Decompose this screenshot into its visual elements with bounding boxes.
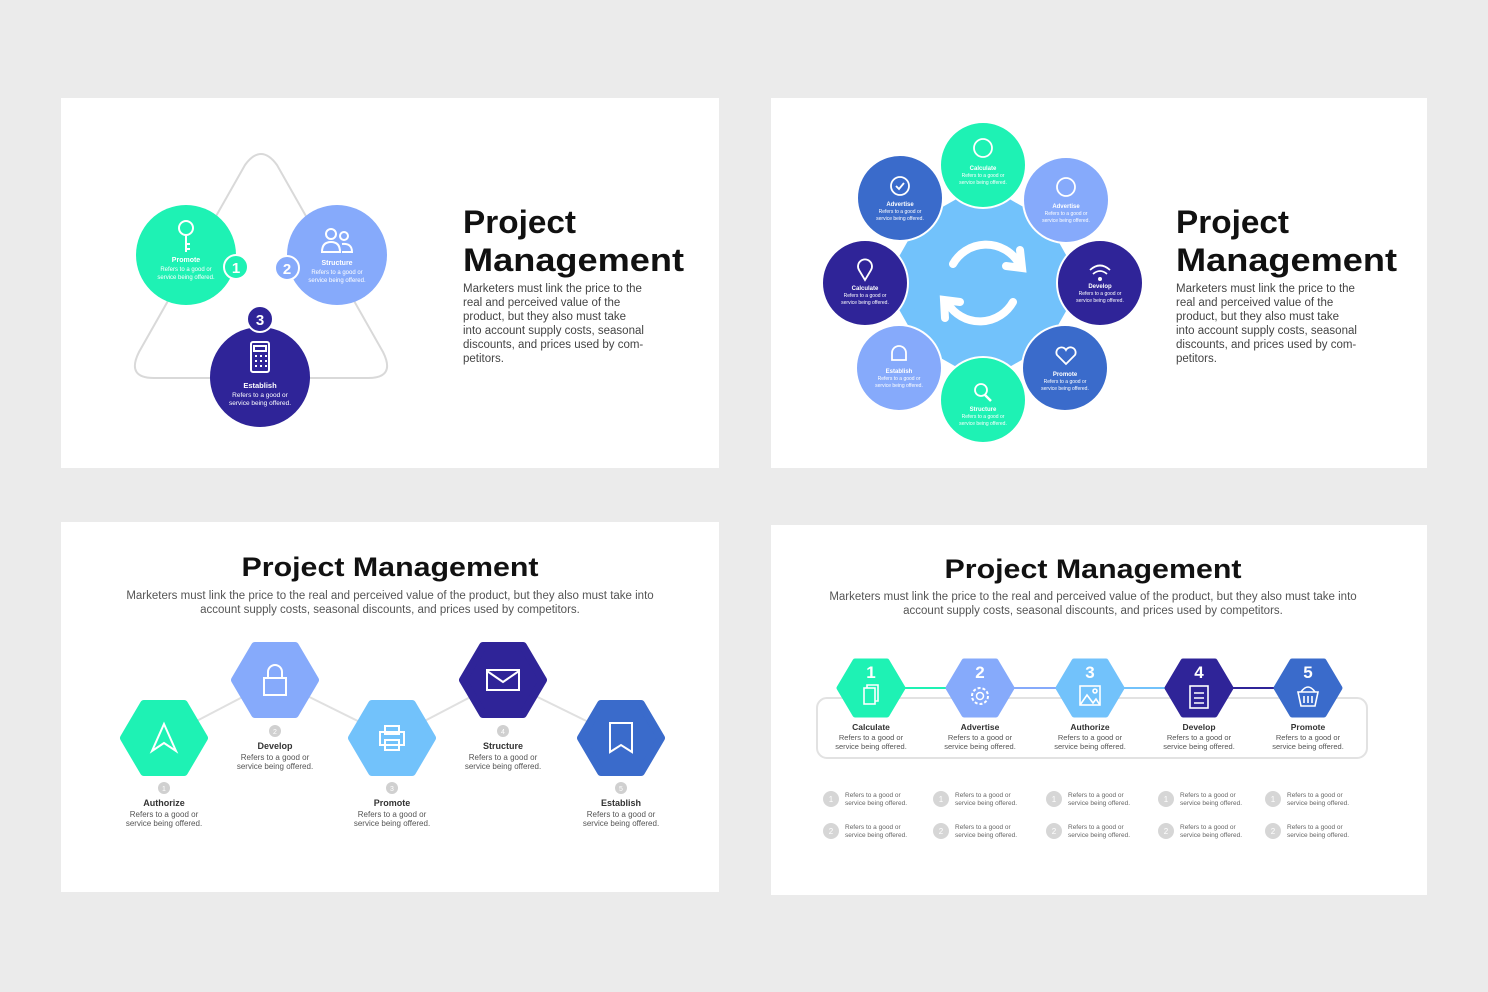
step 2 advertise: Advertise <box>961 722 1000 732</box>
circle: structure: Structure <box>321 260 353 267</box>
body text: petitors. <box>1176 353 1217 365</box>
hex: promote <box>352 704 432 828</box>
node: promote: Refers to a good or <box>1044 379 1087 385</box>
step 4 develop: Refers to a good or <box>1167 733 1232 742</box>
subtitle <box>126 590 654 616</box>
heading: Management <box>1176 242 1397 278</box>
body text: petitors. <box>463 353 504 365</box>
node: establish: Refers to a good or <box>878 376 921 382</box>
heading: Project Management <box>944 554 1242 584</box>
hex: promote: 3 <box>390 786 394 793</box>
circle: establish: Establish <box>243 381 277 390</box>
step 1 calculate: service being offered. <box>835 742 907 751</box>
step 5 promote <box>1272 661 1344 751</box>
hex: promote: Promote <box>374 798 410 808</box>
node: calculate top: Calculate <box>970 166 997 172</box>
node: structure: service being offered. <box>959 421 1007 427</box>
node: establish <box>856 325 942 411</box>
hex: establish: Establish <box>601 798 641 808</box>
card outline <box>817 698 1367 758</box>
step 5 promote: Promote <box>1291 722 1326 732</box>
node: develop <box>1057 240 1143 326</box>
node: calculate left: Calculate <box>852 286 879 292</box>
detail list: service being offered. <box>955 800 1017 807</box>
detail list: 1 <box>829 795 834 804</box>
hex: develop: Refers to a good or <box>241 753 310 762</box>
subtitle: account supply costs, seasonal discounts, and prices used by competitors. <box>903 605 1283 617</box>
detail list: Refers to a good or <box>1180 824 1236 831</box>
detail list: service being offered. <box>1287 832 1349 839</box>
node: advertise left: Advertise <box>886 202 914 208</box>
detail list: 1 <box>1164 795 1169 804</box>
connector line <box>900 687 1280 689</box>
detail list <box>823 791 1349 839</box>
step 3 authorize: Refers to a good or <box>1058 733 1123 742</box>
node: calculate top: service being offered. <box>959 180 1007 186</box>
detail list: service being offered. <box>1287 800 1349 807</box>
body text: into account supply costs, seasonal <box>463 325 644 337</box>
circle: structure: service being offered. <box>308 278 366 284</box>
hex: structure: 4 <box>501 729 505 736</box>
body text: Marketers must link the price to the <box>1176 283 1355 295</box>
detail list: 2 <box>1052 827 1057 836</box>
body text: real and perceived value of the <box>463 297 620 309</box>
detail list: Refers to a good or <box>1287 824 1343 831</box>
detail list: Refers to a good or <box>955 792 1011 799</box>
hex: structure: service being offered. <box>465 762 541 771</box>
circle: promote: Refers to a good or <box>160 267 212 273</box>
circle: promote <box>136 205 236 305</box>
subtitle <box>829 591 1357 617</box>
node: calculate top: Refers to a good or <box>962 173 1005 179</box>
hex: structure <box>463 646 543 771</box>
step 4 develop: Develop <box>1182 722 1216 732</box>
heading <box>463 204 684 278</box>
hex: structure: Structure <box>483 741 523 751</box>
hex: authorize <box>124 704 204 828</box>
hex: develop: Develop <box>257 741 293 751</box>
body text: discounts, and prices used by com- <box>463 339 643 351</box>
step 3 authorize: Authorize <box>1070 722 1110 732</box>
detail list: Refers to a good or <box>1068 792 1124 799</box>
detail list: 1 <box>939 795 944 804</box>
node: advertise right <box>1023 157 1109 243</box>
detail list: 2 <box>829 827 834 836</box>
node: calculate left: service being offered. <box>841 300 889 306</box>
hex: develop: service being offered. <box>237 762 313 771</box>
subtitle: Marketers must link the price to the real and perceived value of the product, but they also must take into <box>126 590 654 602</box>
body text: into account supply costs, seasonal <box>1176 325 1357 337</box>
node: develop: Refers to a good or <box>1079 291 1122 297</box>
step 1 calculate: Refers to a good or <box>839 733 904 742</box>
hex: establish: Refers to a good or <box>587 810 656 819</box>
badge 2: 2 <box>283 261 291 278</box>
detail list: service being offered. <box>1180 832 1242 839</box>
circle: establish <box>210 327 310 427</box>
circle: promote: Promote <box>172 257 200 264</box>
badge 1 <box>224 255 248 279</box>
heading: Project <box>1176 204 1289 240</box>
step 5 promote: Refers to a good or <box>1276 733 1341 742</box>
panel: circular cycle <box>771 98 1427 468</box>
subtitle: account supply costs, seasonal discounts, and prices used by competitors. <box>200 604 580 616</box>
detail list: service being offered. <box>1180 800 1242 807</box>
hex: promote: service being offered. <box>354 819 430 828</box>
detail list: 2 <box>1164 827 1169 836</box>
detail list: Refers to a good or <box>1180 792 1236 799</box>
center shape with refresh icon <box>904 204 1062 362</box>
detail list: 1 <box>1052 795 1057 804</box>
body text <box>463 283 644 365</box>
circle: promote: service being offered. <box>157 275 215 281</box>
hex: establish <box>581 704 661 828</box>
node: calculate left: Refers to a good or <box>844 293 887 299</box>
circle: establish: Refers to a good or <box>232 392 289 399</box>
body text: Marketers must link the price to the <box>463 283 642 295</box>
hex: develop: 2 <box>273 729 277 736</box>
hex: authorize: Refers to a good or <box>130 810 199 819</box>
badge 2 <box>275 256 299 280</box>
connectors <box>164 680 621 738</box>
node: structure <box>940 357 1026 443</box>
detail list: Refers to a good or <box>845 824 901 831</box>
node: advertise right: Advertise <box>1052 204 1080 210</box>
step 1 calculate <box>835 661 907 751</box>
hex: authorize: service being offered. <box>126 819 202 828</box>
node: develop: Develop <box>1088 284 1112 290</box>
step 2 advertise <box>944 661 1016 751</box>
step 3 authorize: 3 <box>1085 663 1095 682</box>
step 3 authorize <box>1054 661 1126 751</box>
panel: triangle cycle <box>61 98 719 468</box>
node: advertise right: service being offered. <box>1042 218 1090 224</box>
node: develop: service being offered. <box>1076 298 1124 304</box>
heading <box>1176 204 1397 278</box>
hex: establish: 5 <box>619 786 623 793</box>
circle: structure <box>287 205 387 305</box>
step 2 advertise: service being offered. <box>944 742 1016 751</box>
node: establish: service being offered. <box>875 383 923 389</box>
node: promote <box>1022 325 1108 411</box>
node: structure: Refers to a good or <box>962 414 1005 420</box>
triangle outline <box>135 154 387 378</box>
panel: zigzag hexagons <box>61 522 719 892</box>
detail list: service being offered. <box>845 832 907 839</box>
detail list: service being offered. <box>1068 800 1130 807</box>
detail list: Refers to a good or <box>955 824 1011 831</box>
step 5 promote: service being offered. <box>1272 742 1344 751</box>
node: calculate top <box>940 122 1026 208</box>
detail list: service being offered. <box>845 800 907 807</box>
node: promote: Promote <box>1053 372 1078 378</box>
step 5 promote: 5 <box>1303 663 1313 682</box>
step 1 calculate: Calculate <box>852 722 890 732</box>
detail list: Refers to a good or <box>1068 824 1124 831</box>
hex: authorize: Authorize <box>143 798 185 808</box>
step 3 authorize: service being offered. <box>1054 742 1126 751</box>
badge 3 <box>247 306 273 332</box>
node: establish: Establish <box>886 369 913 375</box>
hex: promote: Refers to a good or <box>358 810 427 819</box>
body text: discounts, and prices used by com- <box>1176 339 1356 351</box>
node: promote: service being offered. <box>1041 386 1089 392</box>
node: advertise left: service being offered. <box>876 216 924 222</box>
node: calculate left <box>822 240 908 326</box>
step 1 calculate: 1 <box>866 663 876 682</box>
body text: product, but they also must take <box>1176 311 1339 323</box>
node: advertise left: Refers to a good or <box>879 209 922 215</box>
detail list: 2 <box>1271 827 1276 836</box>
detail list: service being offered. <box>1068 832 1130 839</box>
detail list: 2 <box>939 827 944 836</box>
panel: hexagon timeline <box>771 525 1427 895</box>
detail list: 1 <box>1271 795 1276 804</box>
circle: establish: service being offered. <box>229 400 291 407</box>
step 2 advertise: 2 <box>975 663 985 682</box>
circle: structure: Refers to a good or <box>311 270 363 276</box>
badge 3: 3 <box>256 312 264 329</box>
body text: product, but they also must take <box>463 311 626 323</box>
heading: Management <box>463 242 684 278</box>
detail list: Refers to a good or <box>845 792 901 799</box>
subtitle: Marketers must link the price to the real and perceived value of the product, but they also must take into <box>829 591 1357 603</box>
node: advertise left <box>857 155 943 241</box>
step 4 develop: service being offered. <box>1163 742 1235 751</box>
detail list: service being offered. <box>955 832 1017 839</box>
step 4 develop <box>1163 661 1235 751</box>
hex: develop <box>235 646 315 771</box>
hex: establish: service being offered. <box>583 819 659 828</box>
hex: authorize: 1 <box>162 786 166 793</box>
node: advertise right: Refers to a good or <box>1045 211 1088 217</box>
detail list: Refers to a good or <box>1287 792 1343 799</box>
heading: Project <box>463 204 576 240</box>
hex: structure: Refers to a good or <box>469 753 538 762</box>
step 2 advertise: Refers to a good or <box>948 733 1013 742</box>
step 4 develop: 4 <box>1194 663 1204 682</box>
body text: real and perceived value of the <box>1176 297 1333 309</box>
badge 1: 1 <box>232 260 240 277</box>
body text <box>1176 283 1357 365</box>
heading: Project Management <box>242 552 538 582</box>
node: structure: Structure <box>970 407 997 413</box>
